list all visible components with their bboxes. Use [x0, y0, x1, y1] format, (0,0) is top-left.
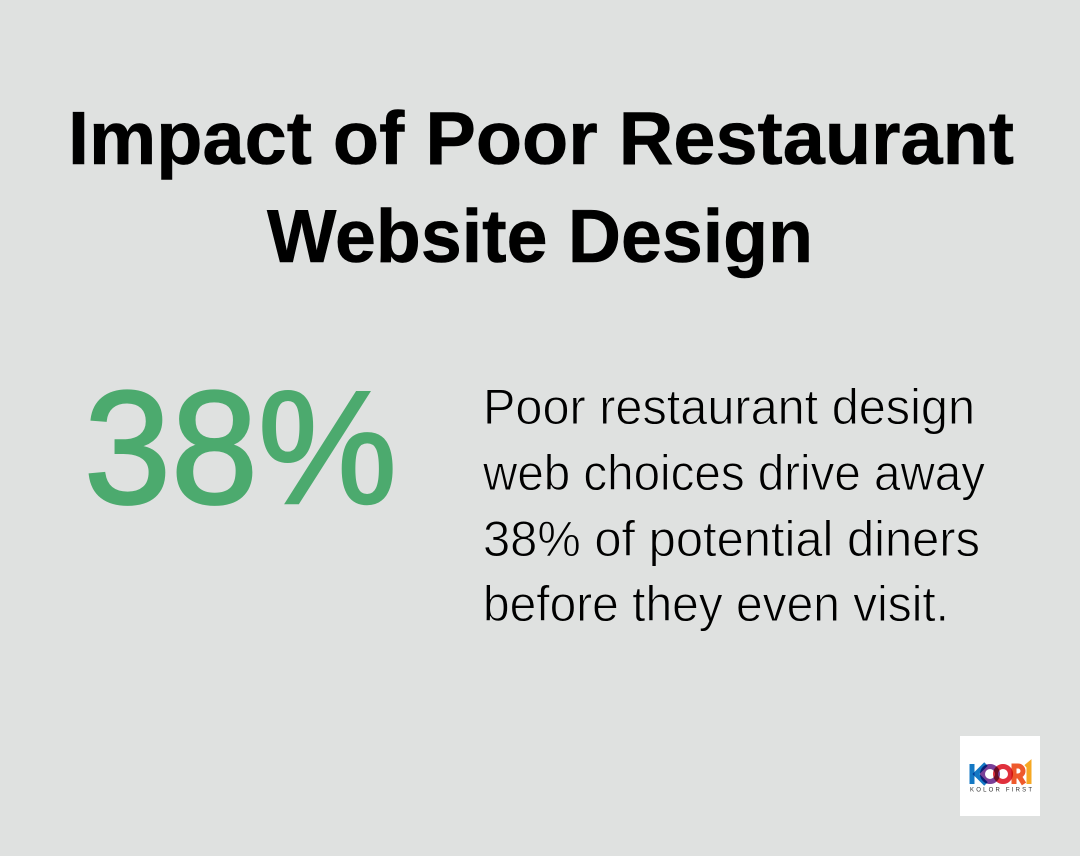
big statistic: 38%: 38% [84, 358, 397, 538]
description text: before they even visit. [483, 576, 949, 632]
logo: Koor1 Kolor First [960, 736, 1040, 816]
description text: 38% of potential diners [483, 511, 980, 567]
title: Website Design [267, 194, 813, 278]
logo tagline: KOLOR FIRST [970, 788, 1032, 794]
description text: Poor restaurant design [483, 379, 975, 435]
description text: web choices drive away [482, 445, 985, 501]
title [68, 96, 1014, 278]
logo background [960, 736, 1040, 816]
title: Impact of Poor Restaurant [68, 96, 1014, 180]
description text [482, 379, 985, 632]
logo mark [972, 764, 1029, 784]
